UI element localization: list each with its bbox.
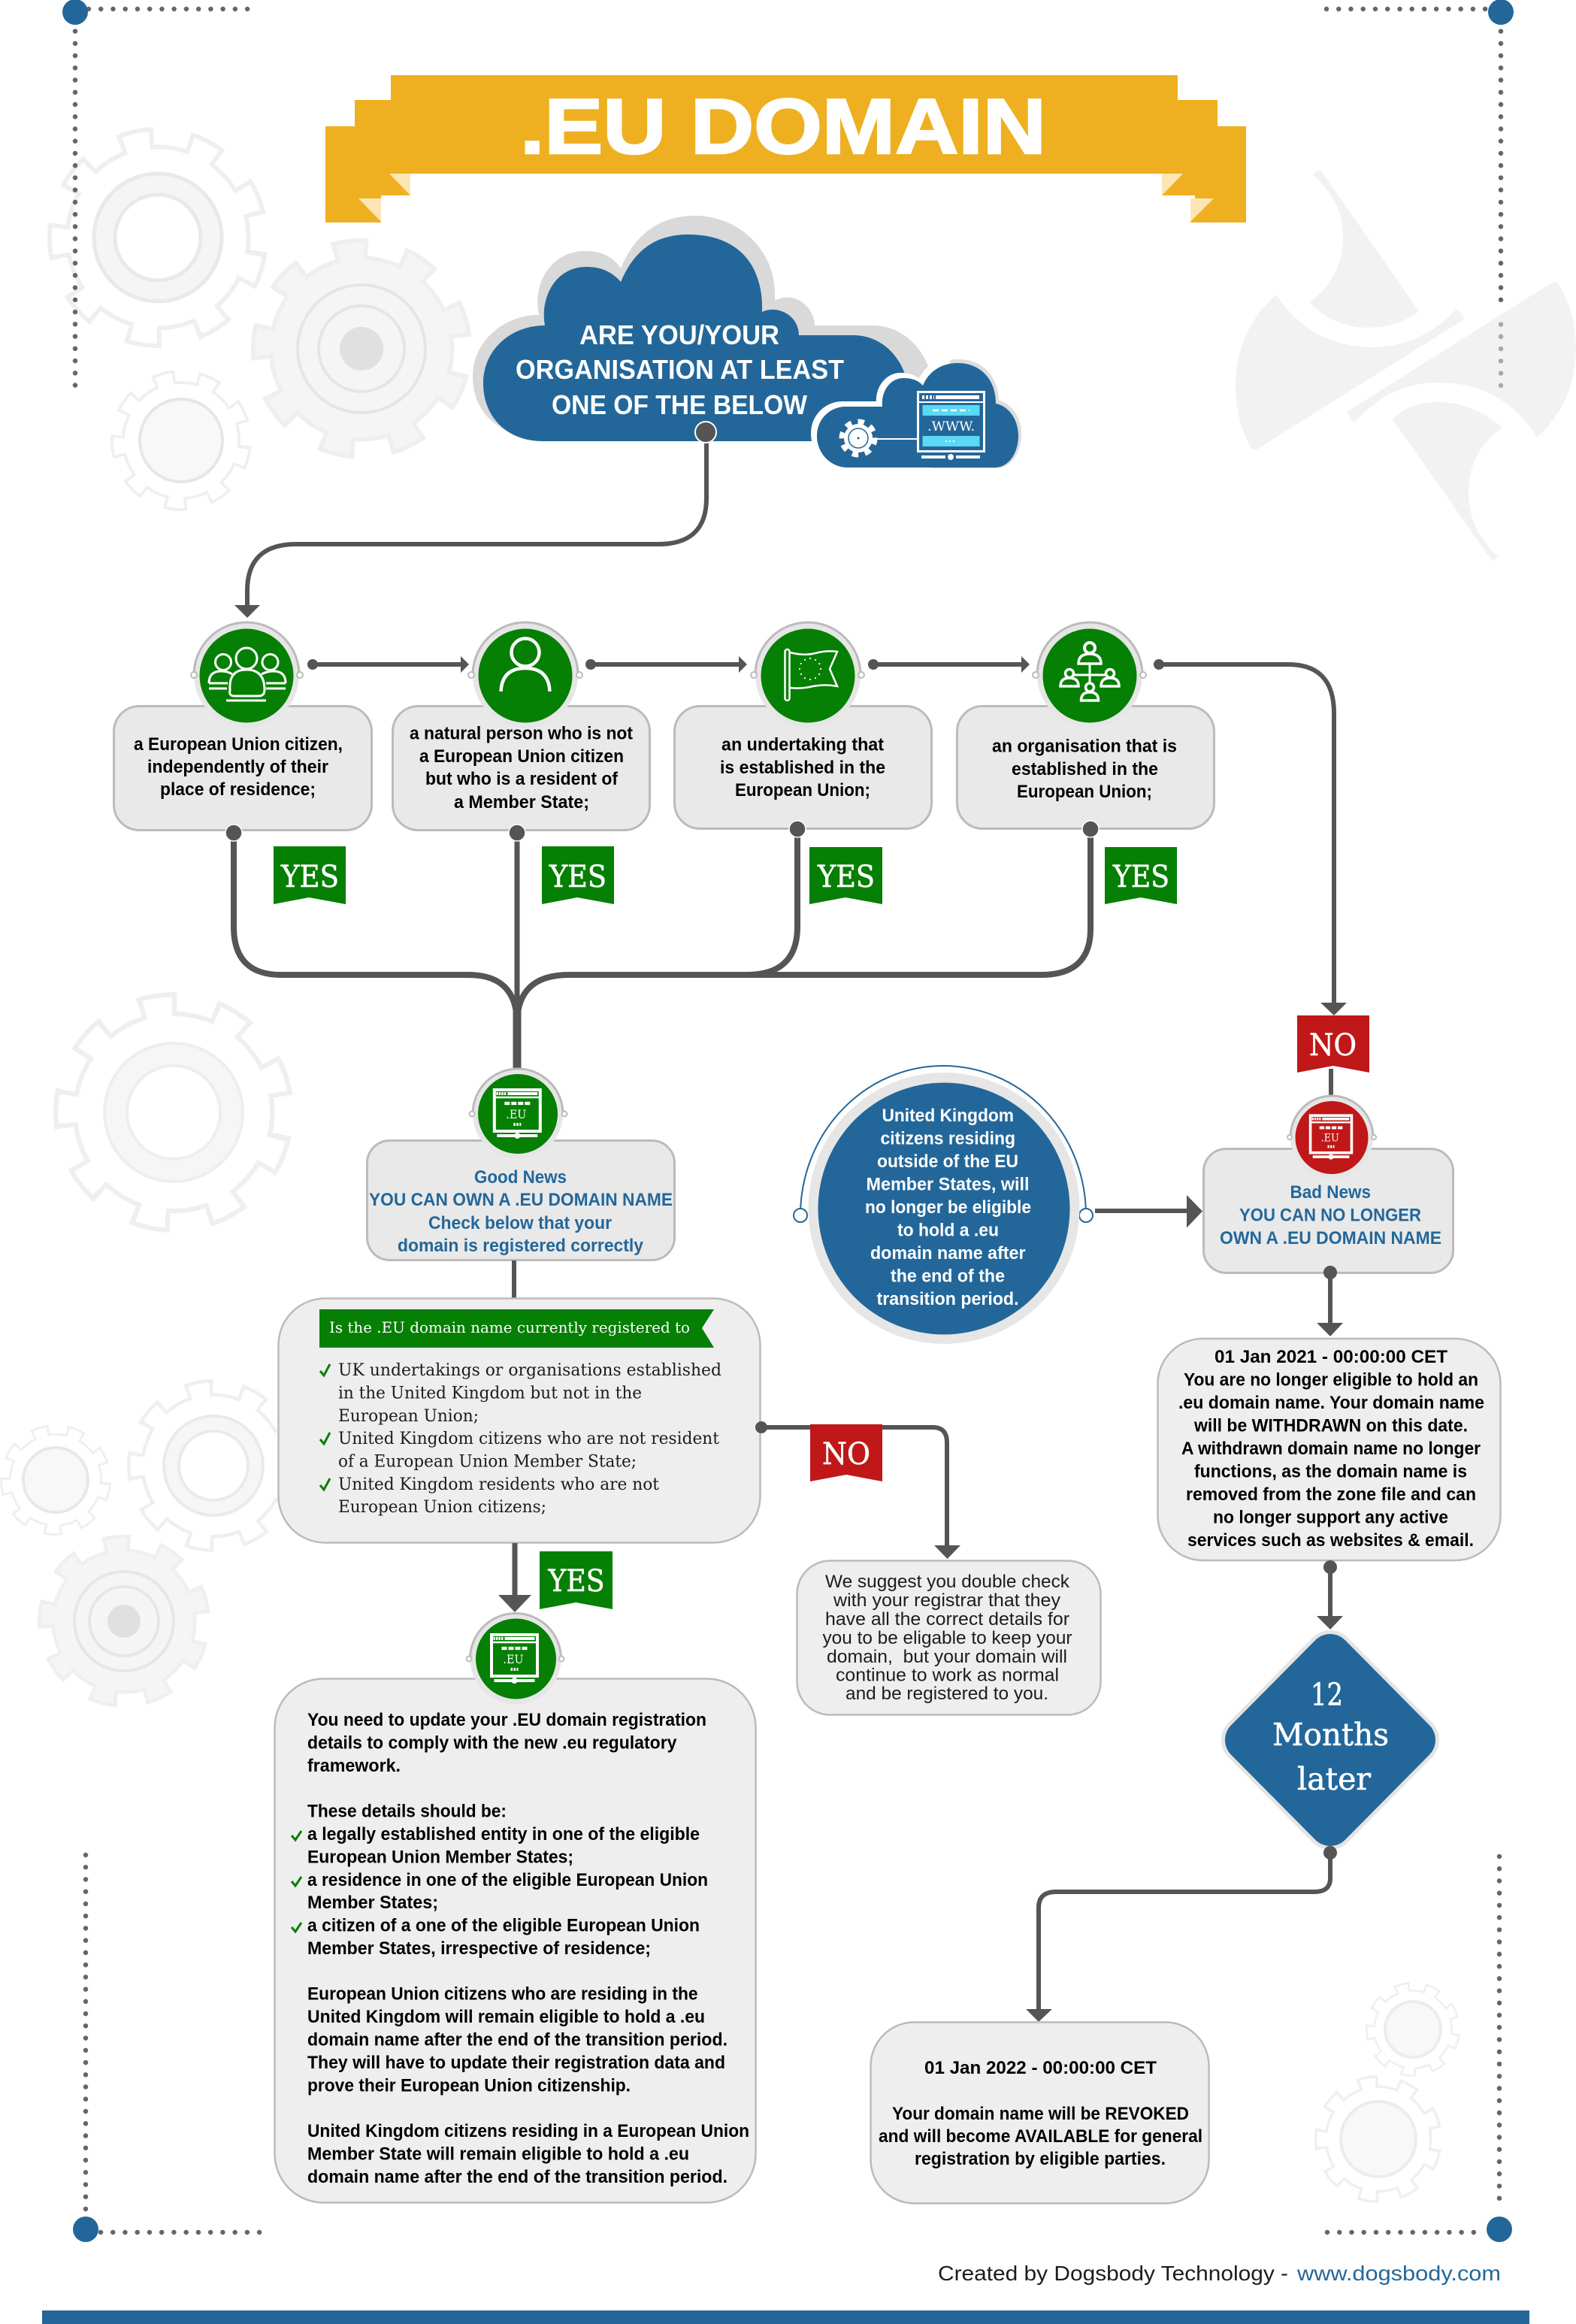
text: update details: prove their European Union citizenship. bbox=[307, 2076, 631, 2096]
text: update details: domain name after the end of the transition period. bbox=[307, 2029, 728, 2050]
panel: suggestion: and be registered to you. bbox=[845, 1684, 1048, 1704]
title ribbon bbox=[325, 75, 1246, 226]
text: update details: European Union citizens who are residing in the bbox=[307, 1984, 697, 2004]
panel: 01 Jan 2021: services such as websites & email. bbox=[1187, 1530, 1474, 1551]
text: good news: domain is registered correctly bbox=[398, 1236, 644, 1256]
frame: bottom left corner bbox=[73, 1855, 261, 2242]
background gear 7 bbox=[28, 1525, 220, 1717]
background gear 5 bbox=[2, 1427, 109, 1533]
text: EU citizen bbox=[134, 734, 343, 800]
text: undertaking: is established in the bbox=[720, 758, 885, 778]
list: UK entities: United Kingdom residents who are not bbox=[338, 1475, 659, 1494]
text: natural person: a Member State; bbox=[454, 792, 589, 812]
arrow: circle 2 to circle 3 bbox=[585, 656, 747, 673]
yes flag 1: YES bbox=[280, 860, 339, 894]
yes flag 4: YES bbox=[1112, 860, 1169, 894]
text: update details: a citizen of a one of the eligible European Union bbox=[307, 1915, 700, 1936]
background gear 6 bbox=[123, 1375, 304, 1557]
text: EU citizen: place of residence; bbox=[160, 779, 316, 800]
list: UK entities: European Union; bbox=[338, 1407, 479, 1426]
background gear 1 bbox=[44, 124, 271, 351]
panel: good news bbox=[367, 1069, 675, 1260]
text: natural person: but who is a resident of bbox=[425, 769, 619, 789]
panel: 01 Jan 2021: will be WITHDRAWN on this date. bbox=[1193, 1416, 1468, 1436]
cloud question text: ORGANISATION AT LEAST bbox=[516, 354, 844, 385]
arrow: circle 4 to no flag bbox=[1154, 659, 1347, 1015]
frame: top left corner bbox=[62, 0, 251, 386]
callout: UK citizens circle: Member States, will bbox=[866, 1174, 1030, 1195]
icon: red .EU window bbox=[1287, 1096, 1376, 1179]
callout: UK citizens circle: the end of the bbox=[891, 1266, 1005, 1287]
icon: group of people bbox=[191, 622, 303, 728]
footer credit: Created by Dogsbody Technology - bbox=[938, 2262, 1288, 2285]
text: bad news: Bad News bbox=[1290, 1182, 1371, 1203]
text: good news bbox=[369, 1167, 673, 1256]
background gear 3 bbox=[111, 371, 251, 510]
title text: .EU DOMAIN bbox=[520, 83, 1046, 171]
text: good news: YOU CAN OWN A .EU DOMAIN NAME bbox=[369, 1190, 673, 1210]
icon: www window: .WWW. bbox=[927, 419, 975, 434]
no flag: eligibility bbox=[1297, 1015, 1369, 1073]
background gear 8 bbox=[1366, 1982, 1460, 2077]
text: update details: a residence in one of the eligible European Union bbox=[307, 1870, 708, 1890]
panel: 01 Jan 2022: and will become AVAILABLE for general bbox=[879, 2126, 1202, 2147]
text: update details bbox=[292, 1710, 749, 2187]
list: UK entities: European Union citizens; bbox=[338, 1498, 546, 1517]
banner: list heading: Is the .EU domain name currently registered to bbox=[329, 1318, 690, 1336]
text: organisation: established in the bbox=[1012, 759, 1158, 779]
icon: .EU window bbox=[469, 1069, 567, 1159]
cloud question text: ARE YOU/YOUR bbox=[579, 319, 779, 350]
text: update details: They will have to update their registration data and bbox=[307, 2053, 725, 2073]
text: natural person bbox=[410, 723, 633, 812]
list: UK entities: United Kingdom citizens who are not resident bbox=[338, 1430, 719, 1448]
panel: 01 Jan 2021: .eu domain name. Your domain name bbox=[1178, 1393, 1484, 1413]
cloud question text: ONE OF THE BELOW bbox=[552, 389, 807, 420]
text: update details: Member States; bbox=[307, 1893, 438, 1913]
diamond: 12 months later: 12 bbox=[1311, 1677, 1343, 1713]
text: organisation bbox=[992, 737, 1177, 802]
yes flag: list bbox=[540, 1551, 613, 1609]
arrow: circle 3 to circle 4 bbox=[868, 656, 1030, 673]
text: update details: Member State will remain eligible to hold a .eu bbox=[307, 2144, 689, 2165]
text: good news: Check below that your bbox=[428, 1213, 612, 1233]
panel: 01 Jan 2021: A withdrawn domain name no longer bbox=[1181, 1439, 1481, 1459]
text: update details: domain name after the end of the transition period. bbox=[307, 2167, 728, 2187]
text: bad news: YOU CAN NO LONGER bbox=[1239, 1206, 1421, 1225]
panel: bad news bbox=[1204, 1096, 1453, 1273]
icon: red .EU window: .EU bbox=[1320, 1132, 1339, 1144]
yes flag 3: YES bbox=[817, 860, 875, 894]
diamond: 12 months later bbox=[1246, 1655, 1414, 1825]
icon: .EU window: .EU bbox=[504, 1652, 523, 1666]
list: UK entities: of a European Union Member State; bbox=[338, 1452, 637, 1472]
connector: good news to list bbox=[512, 1260, 516, 1299]
panel: undertaking bbox=[675, 622, 932, 837]
list: UK entities: UK undertakings or organisations established bbox=[338, 1361, 721, 1380]
callout: UK citizens circle: transition period. bbox=[876, 1289, 1019, 1309]
background gear 2 bbox=[240, 227, 483, 471]
small www cloud bbox=[814, 361, 1019, 468]
cloud question text bbox=[516, 319, 844, 420]
icon: .EU window bbox=[466, 1613, 564, 1705]
panel: registration list bbox=[278, 1299, 761, 1542]
text: organisation: an organisation that is bbox=[992, 737, 1177, 756]
background gear 4 bbox=[44, 982, 304, 1242]
question cloud bbox=[473, 216, 928, 441]
panel: 01 Jan 2022: registration by eligible parties. bbox=[915, 2149, 1166, 2169]
panel: 01 Jan 2021: removed from the zone file and can bbox=[1186, 1484, 1476, 1505]
arrow: UK circle to bad news bbox=[1095, 1195, 1202, 1228]
icon: www window bbox=[918, 392, 985, 460]
yes flag 2 bbox=[542, 846, 614, 904]
callout: UK citizens circle: to hold a .eu bbox=[897, 1221, 999, 1240]
text: update details: You need to update your .EU domain registration bbox=[307, 1710, 706, 1730]
panel: update details bbox=[275, 1613, 756, 2202]
panel: 01 Jan 2021 bbox=[1157, 1339, 1500, 1560]
panel: 01 Jan 2021: no longer support any active bbox=[1213, 1508, 1448, 1527]
footer bar bbox=[42, 2310, 1529, 2324]
background gear 9 bbox=[1311, 2071, 1446, 2207]
panel: 01 Jan 2022: Your domain name will be REVOKED bbox=[892, 2104, 1189, 2124]
diamond: 12 months later: Months bbox=[1272, 1717, 1389, 1753]
yes flag 2: YES bbox=[549, 860, 607, 894]
panel: suggestion bbox=[797, 1560, 1100, 1715]
panel: suggestion: domain, but your domain will bbox=[827, 1647, 1067, 1667]
panel: 01 Jan 2021: 01 Jan 2021 - 00:00:00 CET bbox=[1215, 1347, 1447, 1367]
no flag: eligibility: NO bbox=[1309, 1028, 1357, 1063]
background logo mark bbox=[1236, 170, 1576, 561]
text: update details: details to comply with the new .eu regulatory bbox=[307, 1733, 677, 1753]
text: undertaking: an undertaking that bbox=[721, 735, 884, 755]
panel: suggestion: you to be eligable to keep your bbox=[822, 1628, 1072, 1648]
panel: EU citizen bbox=[114, 622, 371, 841]
yes flag 3 bbox=[809, 847, 882, 904]
text: undertaking: European Union; bbox=[735, 780, 870, 800]
yes flag 4 bbox=[1105, 847, 1177, 904]
text: bad news: OWN A .EU DOMAIN NAME bbox=[1220, 1228, 1441, 1248]
arrow: withdrawn to 12 months bbox=[1317, 1560, 1343, 1630]
icon: gear bbox=[842, 422, 917, 455]
callout: UK citizens circle: outside of the EU bbox=[877, 1151, 1018, 1172]
no flag: list bbox=[810, 1424, 882, 1481]
arrow: bad news to withdrawn bbox=[1317, 1266, 1343, 1336]
no flag: list: NO bbox=[822, 1437, 870, 1472]
text: update details: a legally established entity in one of the eligible bbox=[307, 1824, 700, 1844]
icon: person bbox=[468, 622, 582, 728]
text: update details: These details should be: bbox=[307, 1801, 507, 1822]
text: good news: Good News bbox=[474, 1167, 567, 1188]
text: update details: United Kingdom will remain eligible to hold a .eu bbox=[307, 2007, 705, 2027]
yes flag: list: YES bbox=[548, 1564, 604, 1599]
connector: list to NO bbox=[755, 1421, 960, 1559]
panel: suggestion: We suggest you double check bbox=[825, 1572, 1070, 1592]
text: natural person: a natural person who is not bbox=[410, 723, 633, 744]
text: EU citizen: a European Union citizen, bbox=[134, 734, 343, 755]
panel: natural person bbox=[392, 622, 649, 841]
callout: UK citizens circle bbox=[794, 1066, 1093, 1344]
panel: suggestion: continue to work as normal bbox=[836, 1666, 1059, 1685]
connector: yes branches merging bbox=[234, 829, 1090, 1071]
text: EU citizen: independently of their bbox=[147, 757, 328, 777]
yes flag 1 bbox=[274, 846, 346, 904]
panel: organisation bbox=[957, 622, 1215, 837]
icon: .EU window: .EU bbox=[506, 1107, 526, 1121]
panel: 01 Jan 2021: functions, as the domain name is bbox=[1194, 1461, 1467, 1482]
callout: UK citizens circle: domain name after bbox=[870, 1243, 1025, 1263]
list: UK entities bbox=[320, 1361, 721, 1517]
connector: no flag to bad news bbox=[1329, 1069, 1333, 1097]
callout: UK citizens circle: citizens residing bbox=[881, 1129, 1015, 1148]
footer credit bbox=[938, 2262, 1501, 2285]
panel: 01 Jan 2022 bbox=[870, 2022, 1208, 2204]
text: natural person: a European Union citizen bbox=[419, 746, 624, 767]
banner: list heading bbox=[319, 1309, 714, 1348]
text: undertaking bbox=[720, 735, 885, 800]
text: update details: United Kingdom citizens residing in a European Union bbox=[307, 2121, 749, 2141]
callout: UK citizens circle: United Kingdom bbox=[882, 1106, 1014, 1126]
panel: suggestion: with your registrar that they bbox=[833, 1590, 1060, 1611]
icon: organisation bbox=[1033, 622, 1146, 728]
frame: top right corner bbox=[1326, 0, 1514, 386]
text: organisation: European Union; bbox=[1017, 782, 1152, 802]
footer credit: www.dogsbody.com bbox=[1296, 2262, 1501, 2285]
callout: UK citizens circle: no longer be eligible bbox=[865, 1197, 1031, 1218]
text: update details: framework. bbox=[307, 1756, 401, 1776]
text: update details: European Union Member States; bbox=[307, 1847, 573, 1867]
list: UK entities: in the United Kingdom but not in the bbox=[338, 1384, 642, 1403]
diamond: 12 months later: later bbox=[1297, 1761, 1371, 1797]
connector: 12 months to revoked bbox=[1026, 1846, 1337, 2022]
connector: cloud to first circle bbox=[234, 422, 716, 618]
arrow: circle 1 to circle 2 bbox=[307, 656, 469, 673]
panel: suggestion: have all the correct details for bbox=[825, 1609, 1069, 1630]
icon: EU flag bbox=[751, 622, 864, 728]
arrow: list to details bbox=[498, 1543, 531, 1612]
panel: 01 Jan 2021: You are no longer eligible to hold an bbox=[1184, 1369, 1478, 1390]
frame: bottom right corner bbox=[1327, 1856, 1512, 2242]
text: update details: Member States, irrespective of residence; bbox=[307, 1938, 651, 1959]
panel: 01 Jan 2022: 01 Jan 2022 - 00:00:00 CET bbox=[924, 2058, 1157, 2078]
text: bad news bbox=[1220, 1182, 1441, 1248]
